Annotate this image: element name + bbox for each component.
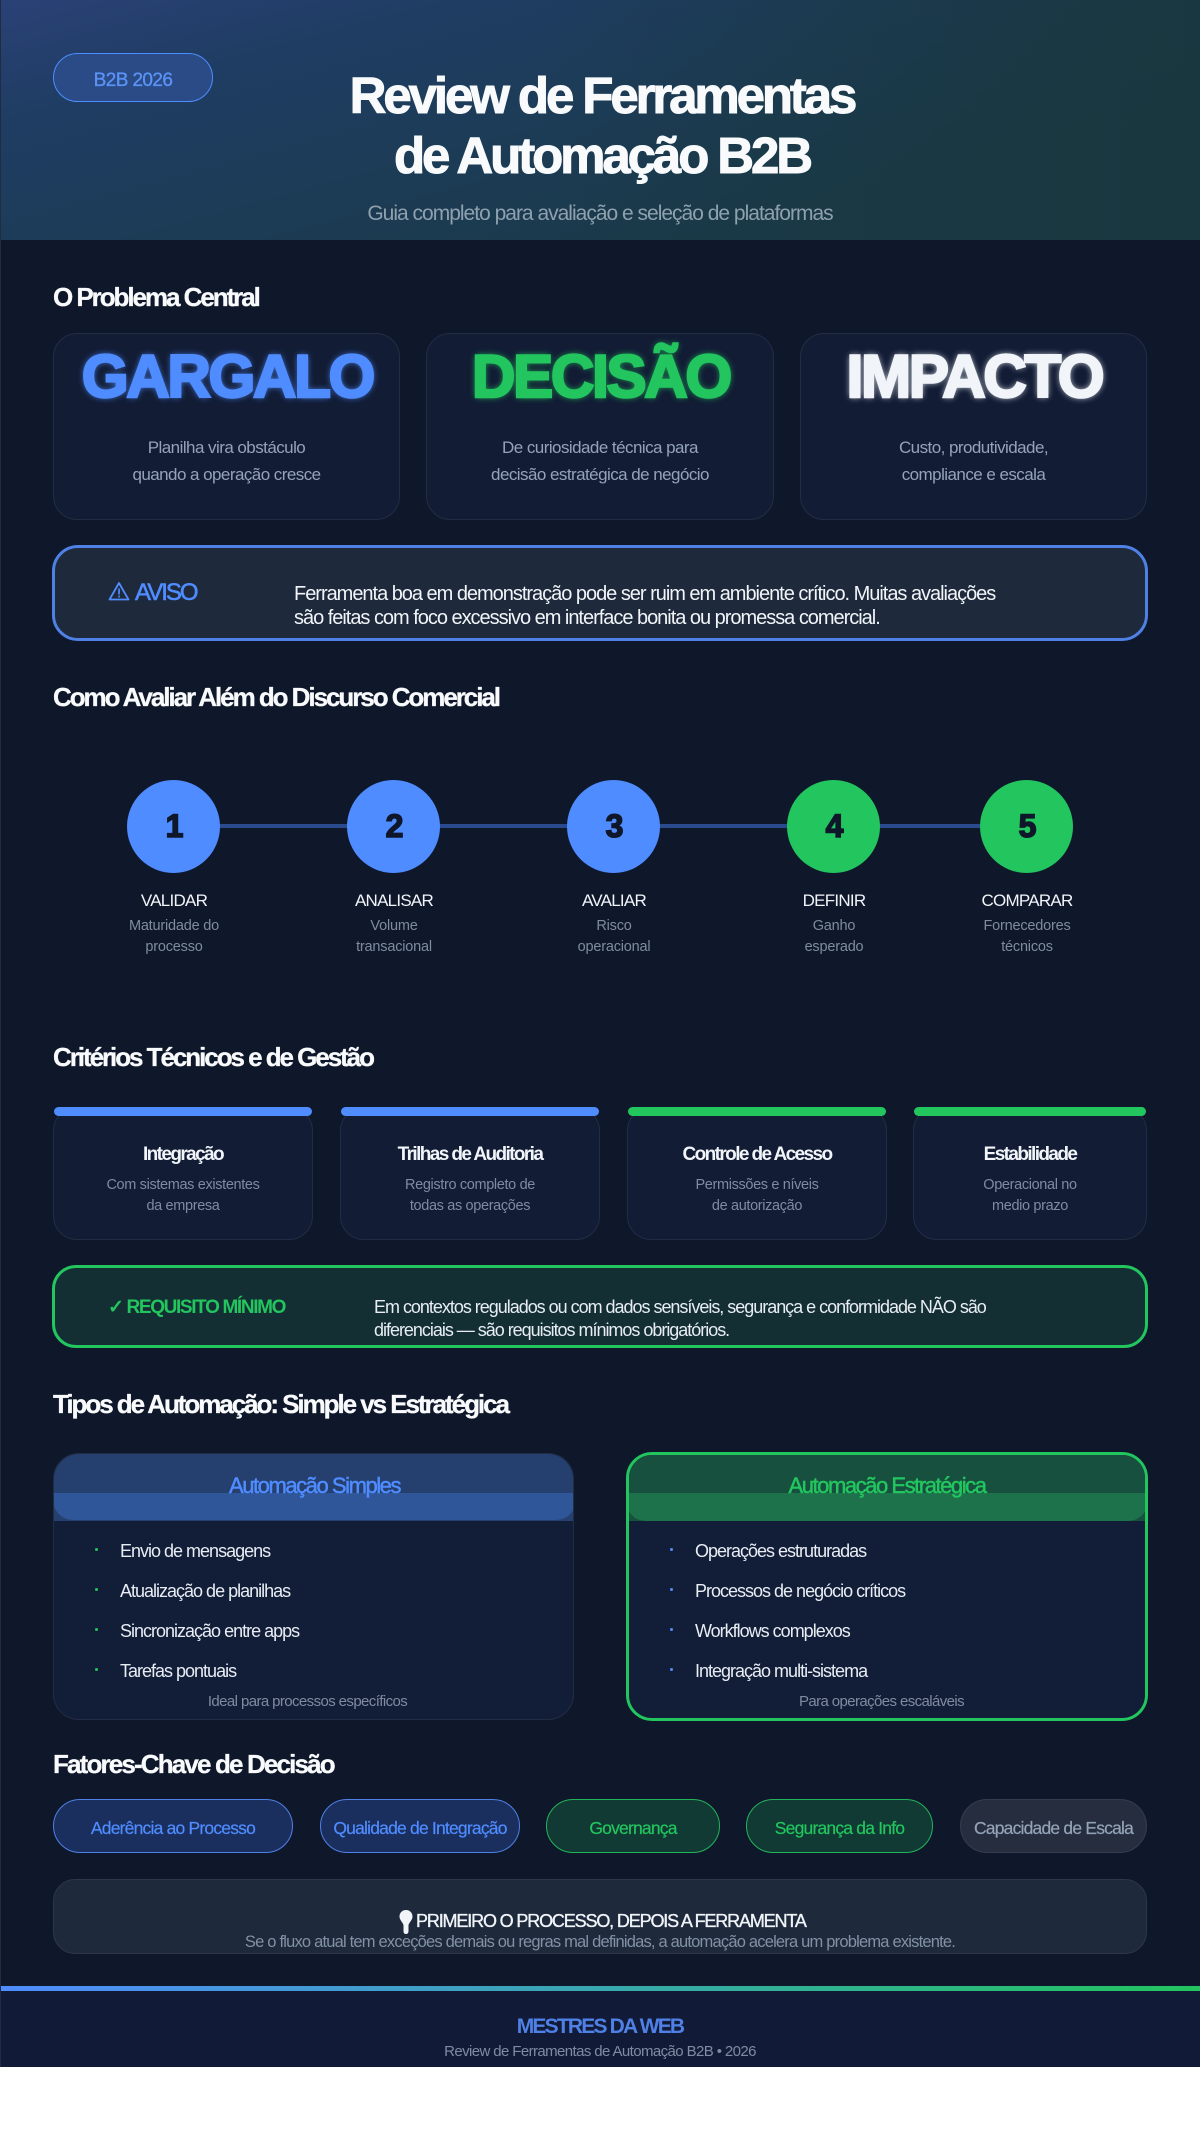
step desc 4: Ganho bbox=[813, 918, 855, 934]
panel: trilhas bbox=[340, 1107, 600, 1240]
description: De curiosidade técnica para bbox=[502, 438, 698, 457]
step desc 3: Risco bbox=[596, 918, 632, 934]
panel: automacao estrategica bbox=[626, 1452, 1148, 1721]
description bbox=[899, 438, 1048, 484]
bullet list bbox=[95, 1541, 300, 1681]
step desc 5: técnicos bbox=[1001, 939, 1053, 955]
callout text: Se o fluxo atual tem exceções demais ou regras mal definidas, a automação acelera um problema existente. bbox=[245, 1933, 955, 1951]
step desc 3 bbox=[578, 918, 650, 955]
warning text: Ferramenta boa em demonstração pode ser ruim em ambiente crítico. Muitas avaliações bbox=[294, 583, 995, 605]
heading: fatores: Fatores-Chave de Decisão bbox=[53, 1749, 334, 1779]
panel: gargalo bbox=[53, 333, 400, 520]
criterion text: Operacional no bbox=[983, 1177, 1077, 1193]
description bbox=[132, 438, 321, 484]
step 4: 4 bbox=[826, 808, 843, 844]
accent bar bbox=[341, 1107, 599, 1116]
criterion title: Estabilidade bbox=[984, 1144, 1076, 1165]
badge bbox=[53, 53, 213, 102]
step 2 bbox=[347, 780, 440, 873]
criterion text: medio prazo bbox=[992, 1198, 1068, 1214]
bullet list: Processos de negócio críticos bbox=[695, 1581, 905, 1601]
panel: decisao bbox=[426, 333, 774, 520]
bullet list: Atualização de planilhas bbox=[120, 1581, 290, 1601]
description: Planilha vira obstáculo bbox=[148, 438, 305, 457]
subtitle: Guia completo para avaliação e seleção de plataformas bbox=[367, 202, 833, 225]
warning text: são feitas com foco excessivo em interface bonita ou promessa comercial. bbox=[294, 607, 880, 629]
heading: problema central: O Problema Central bbox=[53, 282, 259, 312]
callout title: PRIMEIRO O PROCESSO, DEPOIS A FERRAMENTA bbox=[416, 1911, 806, 1931]
step label 1: VALIDAR bbox=[141, 891, 207, 910]
pill: seguranca: Segurança da Info bbox=[775, 1818, 904, 1838]
step desc 1: Maturidade do bbox=[129, 918, 219, 934]
step label 5: COMPARAR bbox=[982, 891, 1072, 910]
bullet list: Tarefas pontuais bbox=[120, 1661, 236, 1681]
pill: governanca bbox=[546, 1799, 720, 1853]
badge: B2B 2026 bbox=[94, 70, 172, 91]
step desc 1 bbox=[129, 918, 219, 955]
panel: estabilidade bbox=[913, 1107, 1147, 1240]
warning text bbox=[294, 583, 996, 629]
connector line bbox=[173, 824, 1026, 828]
step desc 2: Volume bbox=[370, 918, 418, 934]
step 1: 1 bbox=[166, 808, 183, 844]
step desc 2: transacional bbox=[356, 939, 432, 955]
pill: qualidade bbox=[320, 1799, 520, 1853]
criterion text: de autorização bbox=[712, 1198, 802, 1214]
footer caption: Review de Ferramentas de Automação B2B • 2026 bbox=[444, 2043, 756, 2060]
label: requisito: ✓ REQUISITO MÍNIMO bbox=[108, 1297, 285, 1318]
step 5 bbox=[980, 780, 1073, 873]
description bbox=[491, 438, 709, 484]
bullet list: Workflows complexos bbox=[695, 1621, 850, 1641]
criterion text: da empresa bbox=[146, 1198, 220, 1214]
step 3: 3 bbox=[606, 808, 623, 844]
callout: requisito minimo bbox=[52, 1265, 1148, 1348]
bullet list: Sincronização entre apps bbox=[120, 1621, 299, 1641]
step desc 5: Fornecedores bbox=[983, 918, 1071, 934]
heading: tipos: Tipos de Automação: Simple vs Estratégica bbox=[53, 1389, 508, 1419]
description: quando a operação cresce bbox=[132, 465, 321, 484]
card header bbox=[53, 1453, 576, 1521]
criterion text: todas as operações bbox=[410, 1198, 530, 1214]
heading: como avaliar: Como Avaliar Além do Discurso Comercial bbox=[53, 682, 499, 712]
step 5: 5 bbox=[1019, 808, 1036, 844]
heading: criterios: Critérios Técnicos e de Gestão bbox=[53, 1042, 373, 1072]
keyword: gargalo: GARGALO bbox=[82, 343, 373, 410]
callout: aviso bbox=[52, 545, 1148, 641]
pill: aderencia: Aderência ao Processo bbox=[91, 1818, 255, 1838]
pill: capacidade bbox=[960, 1799, 1147, 1853]
title bbox=[350, 67, 856, 184]
description: Custo, produtividade, bbox=[899, 438, 1048, 457]
criterion title: Integração bbox=[143, 1144, 223, 1165]
header banner bbox=[0, 0, 1200, 240]
note: Ideal para processos específicos bbox=[208, 1693, 407, 1710]
step 4 bbox=[787, 780, 880, 873]
card header bbox=[626, 1452, 1148, 1521]
header title: Automação Estratégica bbox=[788, 1473, 986, 1498]
requisito text bbox=[374, 1296, 986, 1340]
step label 2: ANALISAR bbox=[355, 891, 433, 910]
step desc 4 bbox=[805, 918, 863, 955]
accent bar bbox=[54, 1107, 312, 1116]
header band bbox=[53, 1493, 576, 1520]
icon: light bulb bbox=[400, 1910, 412, 1934]
bullet list: Operações estruturadas bbox=[695, 1541, 866, 1561]
step desc 1: processo bbox=[145, 939, 203, 955]
step desc 3: operacional bbox=[578, 939, 650, 955]
step label 3: AVALIAR bbox=[582, 891, 646, 910]
gradient rule bbox=[0, 1986, 1200, 1991]
requisito text: Em contextos regulados ou com dados sensíveis, segurança e conformidade NÃO são bbox=[374, 1297, 986, 1317]
step desc 4: esperado bbox=[805, 939, 863, 955]
panel: automacao simples bbox=[53, 1453, 574, 1720]
keyword: impacto: IMPACTO bbox=[847, 343, 1102, 410]
header title: Automação Simples bbox=[229, 1473, 400, 1498]
header band bbox=[626, 1493, 1148, 1521]
pill: seguranca bbox=[746, 1799, 933, 1853]
panel: controle bbox=[627, 1107, 887, 1240]
criterion title: Trilhas de Auditoria bbox=[398, 1144, 542, 1165]
criterion text bbox=[695, 1177, 819, 1214]
step label 4: DEFINIR bbox=[803, 891, 865, 910]
pill: governanca: Governança bbox=[589, 1818, 677, 1838]
requisito text: diferenciais — são requisitos mínimos obrigatórios. bbox=[374, 1320, 729, 1340]
note: Para operações escaláveis bbox=[799, 1693, 964, 1710]
keyword: decisao: DECISÃO bbox=[472, 343, 730, 410]
icon: warning bbox=[108, 582, 130, 600]
bullet list: Integração multi-sistema bbox=[695, 1661, 867, 1681]
criterion text bbox=[405, 1177, 535, 1214]
accent bar bbox=[914, 1107, 1146, 1116]
bullet list bbox=[670, 1541, 906, 1681]
label: aviso: AVISO bbox=[135, 579, 197, 606]
step 2: 2 bbox=[386, 808, 403, 844]
criterion text bbox=[983, 1177, 1077, 1214]
bullet list: Envio de mensagens bbox=[120, 1541, 270, 1561]
panel: impacto bbox=[800, 333, 1147, 520]
step desc 2 bbox=[356, 918, 432, 955]
callout: primeiro o processo bbox=[53, 1879, 1147, 1954]
accent bar bbox=[628, 1107, 886, 1116]
footer brand: MESTRES DA WEB bbox=[517, 2015, 683, 2038]
pill: aderencia bbox=[53, 1799, 293, 1853]
description: compliance e escala bbox=[902, 465, 1045, 484]
criterion title: Controle de Acesso bbox=[683, 1144, 831, 1165]
step 3 bbox=[567, 780, 660, 873]
step desc 5 bbox=[983, 918, 1071, 955]
criterion text bbox=[106, 1177, 260, 1214]
criterion text: Com sistemas existentes bbox=[106, 1177, 260, 1193]
footer bbox=[0, 1986, 1200, 2067]
criterion text: Permissões e níveis bbox=[695, 1177, 819, 1193]
step 1 bbox=[127, 780, 220, 873]
title: Review de Ferramentas bbox=[350, 67, 854, 124]
pill: qualidade: Qualidade de Integração bbox=[333, 1818, 507, 1838]
criterion text: Registro completo de bbox=[405, 1177, 535, 1193]
panel: integracao bbox=[53, 1107, 313, 1240]
title: de Automação B2B bbox=[394, 127, 810, 184]
pill: capacidade: Capacidade de Escala bbox=[974, 1818, 1133, 1838]
description: decisão estratégica de negócio bbox=[491, 465, 709, 484]
process flow bbox=[220, 824, 980, 828]
